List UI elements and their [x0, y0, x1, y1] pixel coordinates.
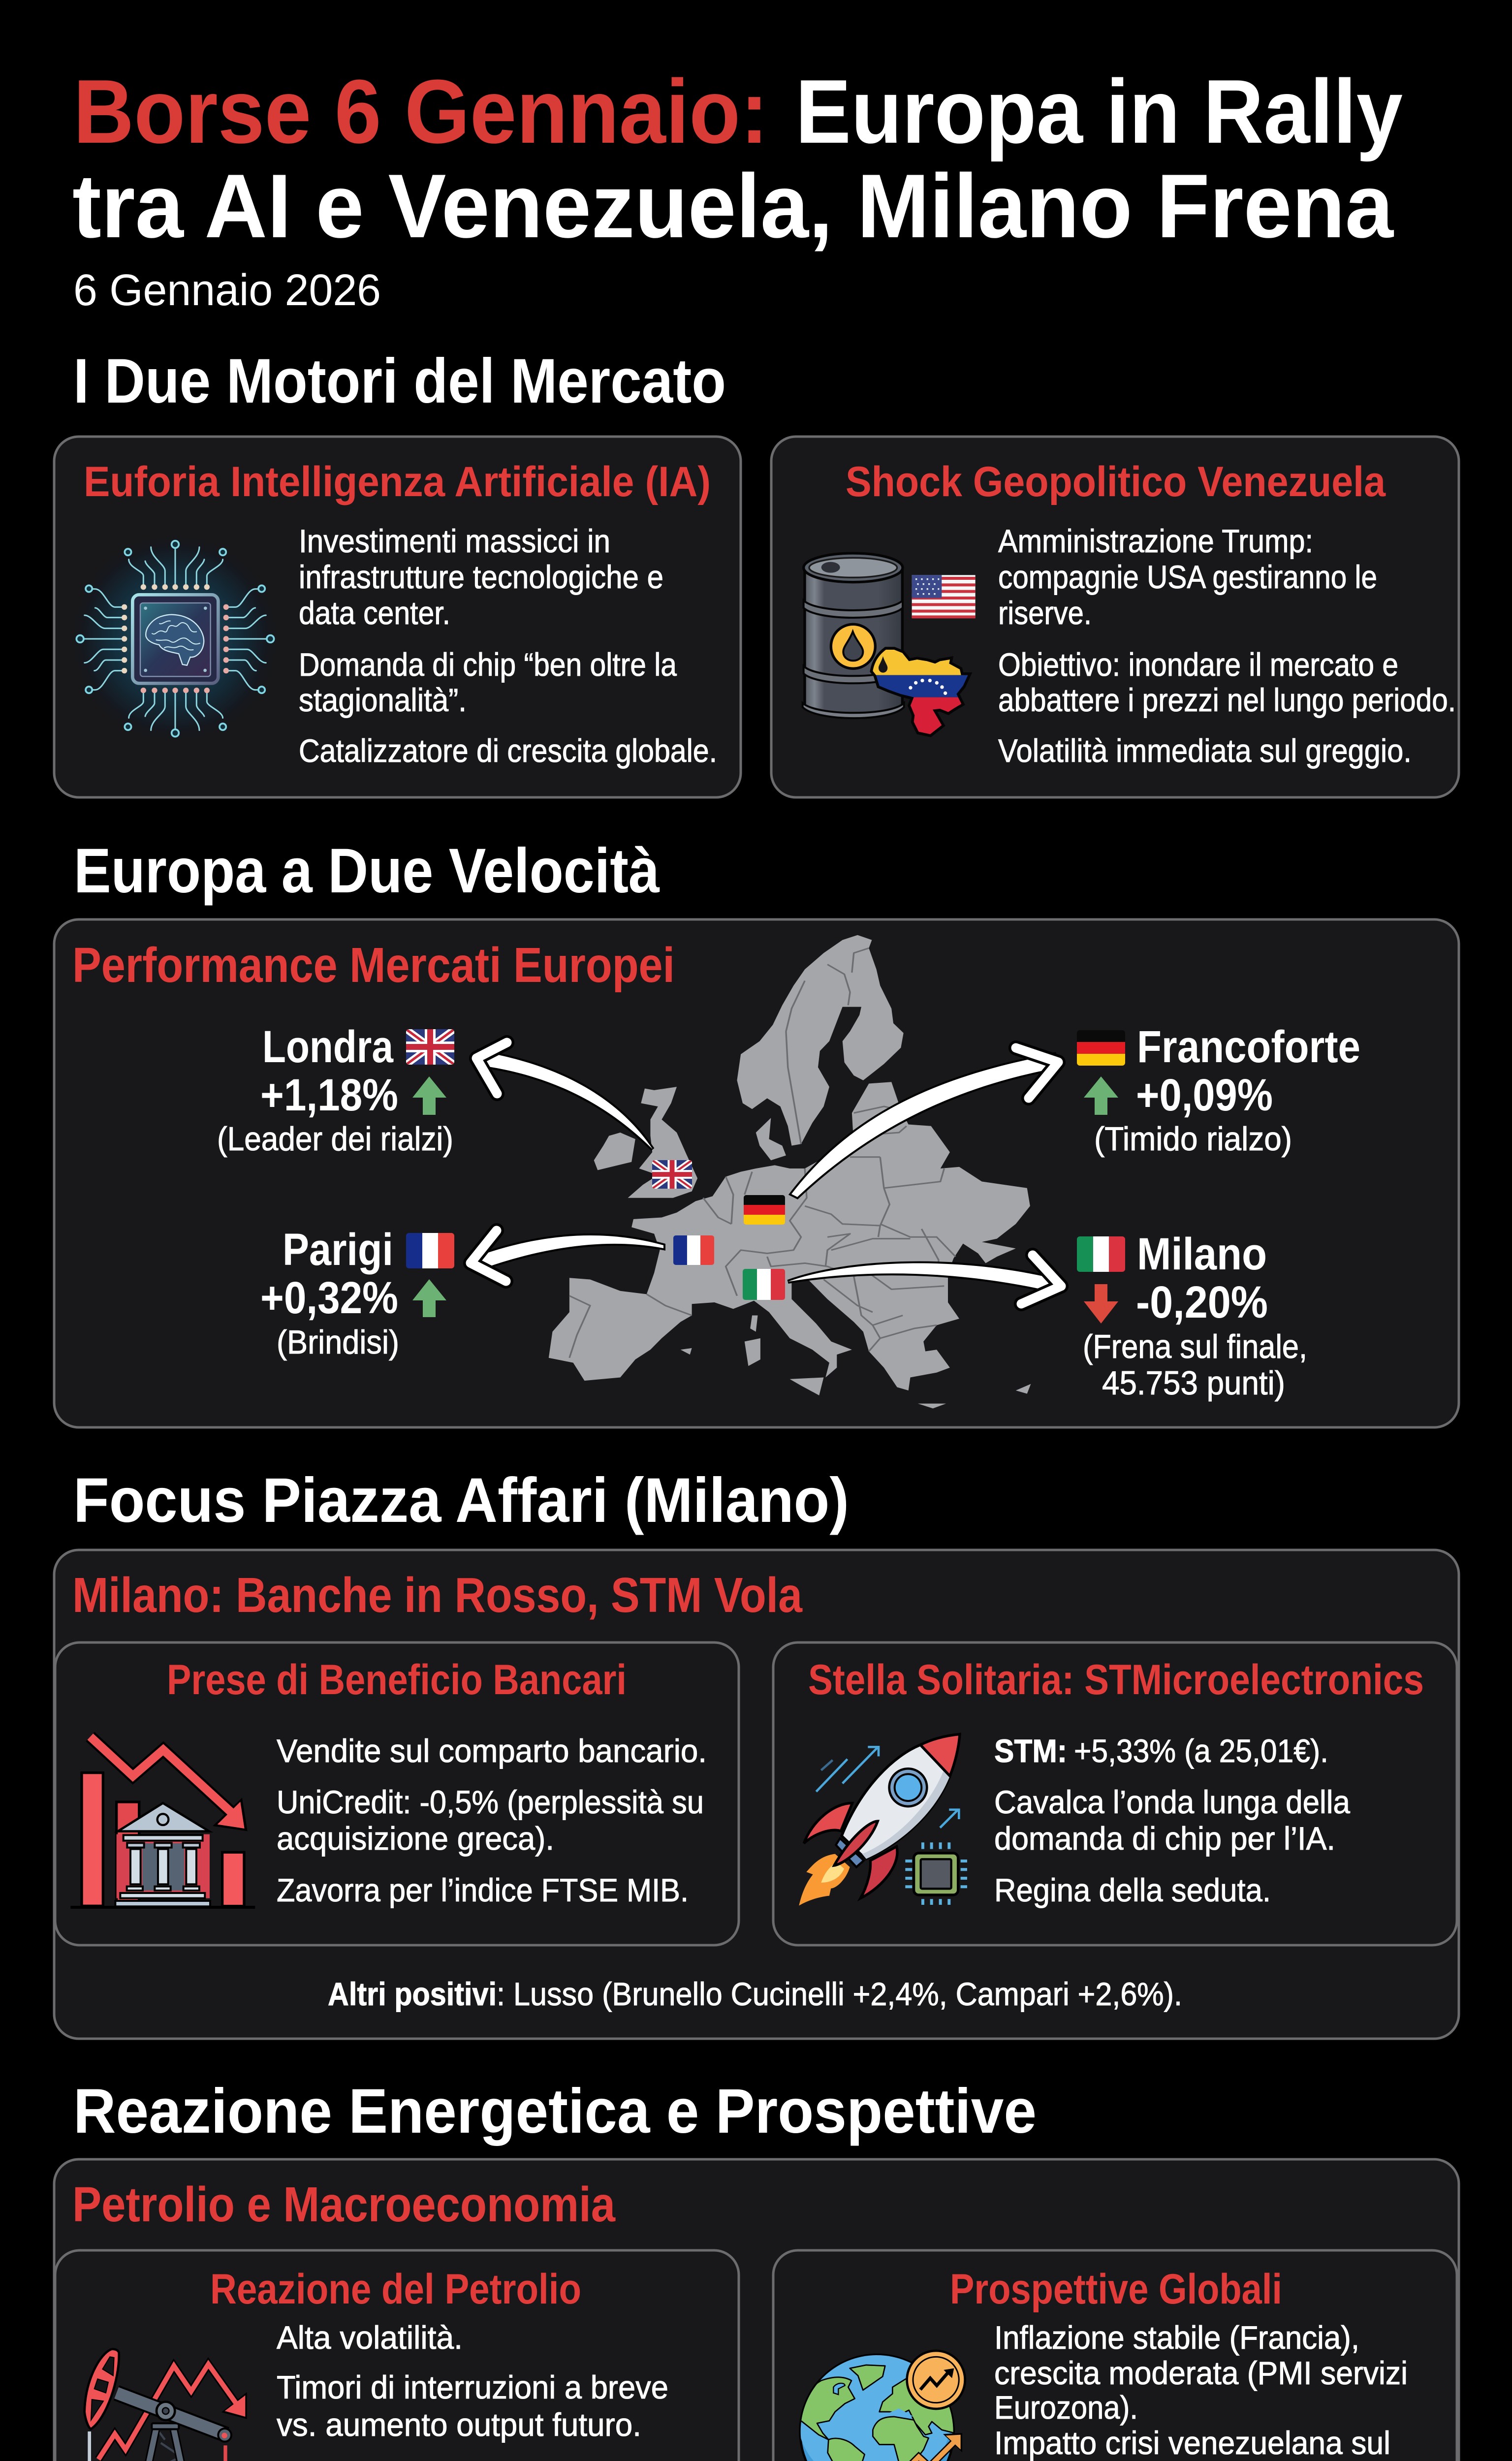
heading: Europa: Europa a Due Velocità [74, 836, 660, 906]
text: IA bullets: Investimenti massicci in [299, 523, 610, 559]
text: STM bullets: Regina della seduta. [994, 1872, 1271, 1908]
sub-panel heading: Prese di Beneficio Bancari [167, 1656, 627, 1704]
text: STM bullets: STM: [994, 1733, 1067, 1769]
callout: Londra [217, 1022, 454, 1158]
flag: UK [406, 1029, 454, 1065]
heading: Reazione: Reazione Energetica e Prospettive [73, 2076, 1037, 2146]
callout: Francoforte: Francoforte [1137, 1022, 1360, 1072]
text: banche bullets [277, 1733, 707, 1908]
text: STM bullets: Cavalca l’onda lunga della [994, 1784, 1350, 1820]
icon: oil barrel [803, 553, 976, 718]
sub-panel heading: Prospettive Globali [950, 2266, 1282, 2313]
text: Venezuela bullets: riserve. [998, 595, 1092, 631]
sub-panel: STM [773, 1642, 1457, 1945]
sub-panel: reazione del petrolio [55, 2250, 739, 2461]
map of Europe [549, 935, 1031, 1409]
text: prospettive bullets: Eurozona). [994, 2389, 1138, 2426]
title [72, 61, 1403, 256]
panel: shock Venezuela [771, 437, 1459, 797]
callout: Parigi: +0,32% [260, 1273, 398, 1323]
icon: globe with chart [797, 2344, 965, 2461]
flag: Italy [1077, 1236, 1125, 1272]
icon: pumpjack [79, 2349, 248, 2461]
text: banche bullets: Vendite sul comparto bancario. [277, 1733, 707, 1769]
flag on map: UK [652, 1160, 692, 1189]
text: IA bullets: Catalizzatore di crescita globale. [299, 732, 717, 769]
text: Venezuela bullets: Amministrazione Trump: [998, 523, 1313, 559]
text: petrolio bullets [277, 2319, 693, 2461]
icon: falling bank [70, 1736, 255, 1907]
callout: Milano: -0,20% [1136, 1277, 1268, 1327]
icon: up arrow [412, 1279, 446, 1317]
text: STM bullets: +5,33% (a 25,01€). [1074, 1733, 1328, 1769]
icon: rocket and chip [799, 1734, 967, 1906]
text: Venezuela bullets: abbattere i prezzi nel lungo periodo. [998, 682, 1456, 718]
text: petrolio bullets: Alta volatilità. [277, 2319, 463, 2356]
callout: Parigi [260, 1225, 454, 1361]
text: Venezuela bullets: Obiettivo: inondare il mercato e [998, 646, 1398, 683]
callout: Milano: Milano [1137, 1229, 1267, 1279]
text: Venezuela bullets [998, 523, 1456, 769]
text: IA bullets: infrastrutture tecnologiche e [299, 559, 663, 595]
text: IA bullets: data center. [299, 595, 450, 631]
text: IA bullets [299, 523, 717, 769]
arrow: Germany to Francoforte [791, 1048, 1058, 1197]
panel heading: Performance Mercati Europei [72, 938, 675, 993]
icon: Venezuela map [870, 646, 971, 737]
text: banche bullets: acquisizione greca). [277, 1820, 554, 1857]
text: STM bullets [994, 1733, 1350, 1908]
text: prospettive bullets: crescita moderata (PMI servizi [994, 2355, 1408, 2391]
text: banche bullets: Zavorra per l’indice FTSE MIB. [277, 1872, 689, 1908]
sub-panel heading: Reazione del Petrolio [210, 2266, 581, 2313]
callout: Londra: +1,18% [260, 1070, 398, 1120]
callout: Francoforte: (Timido rialzo) [1094, 1120, 1292, 1158]
flag: Germany [1077, 1030, 1125, 1066]
panel heading: Euforia Intelligenza Artificiale (IA) [84, 458, 711, 505]
callout: Francoforte: +0,09% [1136, 1070, 1273, 1120]
title: tra AI e Venezuela, Milano Frena [72, 155, 1394, 256]
icon: AI chip [66, 530, 283, 747]
callout: Milano [1077, 1229, 1307, 1402]
callout: Londra: (Leader dei rialzi) [217, 1120, 453, 1158]
title: Europa in Rally [795, 61, 1403, 162]
text: Venezuela bullets: compagnie USA gestiranno le [998, 559, 1377, 595]
icon: up arrow [412, 1076, 446, 1115]
text: prospettive bullets: Impatto crisi venezuelana sul [994, 2425, 1390, 2461]
date: 6 Gennaio 2026 [73, 266, 381, 315]
callout: Francoforte [1077, 1022, 1360, 1158]
text: Venezuela bullets: Volatilità immediata sul greggio. [998, 732, 1412, 769]
panel heading: Shock Geopolitico Venezuela [846, 458, 1386, 505]
panel: petrolio e macroeconomia [54, 2159, 1459, 2461]
text: IA bullets: stagionalità”. [299, 682, 467, 718]
text: petrolio bullets: vs. aumento output futuro. [277, 2406, 641, 2443]
arrow: Italy to Milano [788, 1255, 1061, 1304]
sub-panel: prospettive globali [773, 2250, 1457, 2461]
text: prospettive bullets: Inflazione stabile (Francia), [994, 2319, 1359, 2356]
callout: Parigi: (Brindisi) [277, 1324, 399, 1361]
sub-panel: banche [55, 1642, 739, 1945]
panel heading: Petrolio e Macroeconomia [72, 2177, 616, 2232]
text: STM bullets: domanda di chip per l’IA. [994, 1820, 1335, 1857]
flag: France [406, 1233, 454, 1268]
sub-panel heading: Stella Solitaria: STMicroelectronics [808, 1656, 1424, 1704]
arrow: France to Parigi [471, 1230, 663, 1281]
heading: motori: I Due Motori del Mercato [73, 346, 726, 416]
panel: euforia IA [54, 437, 741, 797]
callout: Parigi: Parigi [283, 1225, 393, 1275]
text: petrolio bullets: Timori di interruzioni a breve [277, 2369, 668, 2405]
text: banche bullets: UniCredit: -0,5% (perplessità su [277, 1784, 704, 1820]
text: altri positivi: Altri positivi [328, 1976, 497, 2012]
icon: down arrow [1084, 1284, 1118, 1324]
flag on map: Germany [744, 1195, 785, 1225]
panel heading: Milano: Banche in Rosso, STM Vola [72, 1568, 803, 1623]
text: altri positivi: : Lusso (Brunello Cucinelli +2,4%, Campari +2,6%). [497, 1976, 1182, 2012]
callout: Milano: (Frena sul finale, [1083, 1328, 1307, 1365]
text: IA bullets: Domanda di chip “ben oltre la [299, 646, 677, 683]
text: prospettive bullets [994, 2319, 1415, 2461]
panel: Milano [54, 1550, 1459, 2039]
title: Borse 6 Gennaio: [73, 61, 768, 162]
callout: Londra: Londra [262, 1022, 394, 1072]
arrow: UK to Londra [476, 1042, 653, 1149]
callout: Milano: 45.753 punti) [1102, 1364, 1285, 1402]
flag on map: Italy [743, 1269, 785, 1300]
flag on map: France [673, 1235, 714, 1265]
icon: up arrow [1084, 1076, 1118, 1115]
heading: Focus: Focus Piazza Affari (Milano) [73, 1465, 849, 1536]
panel: performance mercati europei [54, 919, 1459, 1427]
